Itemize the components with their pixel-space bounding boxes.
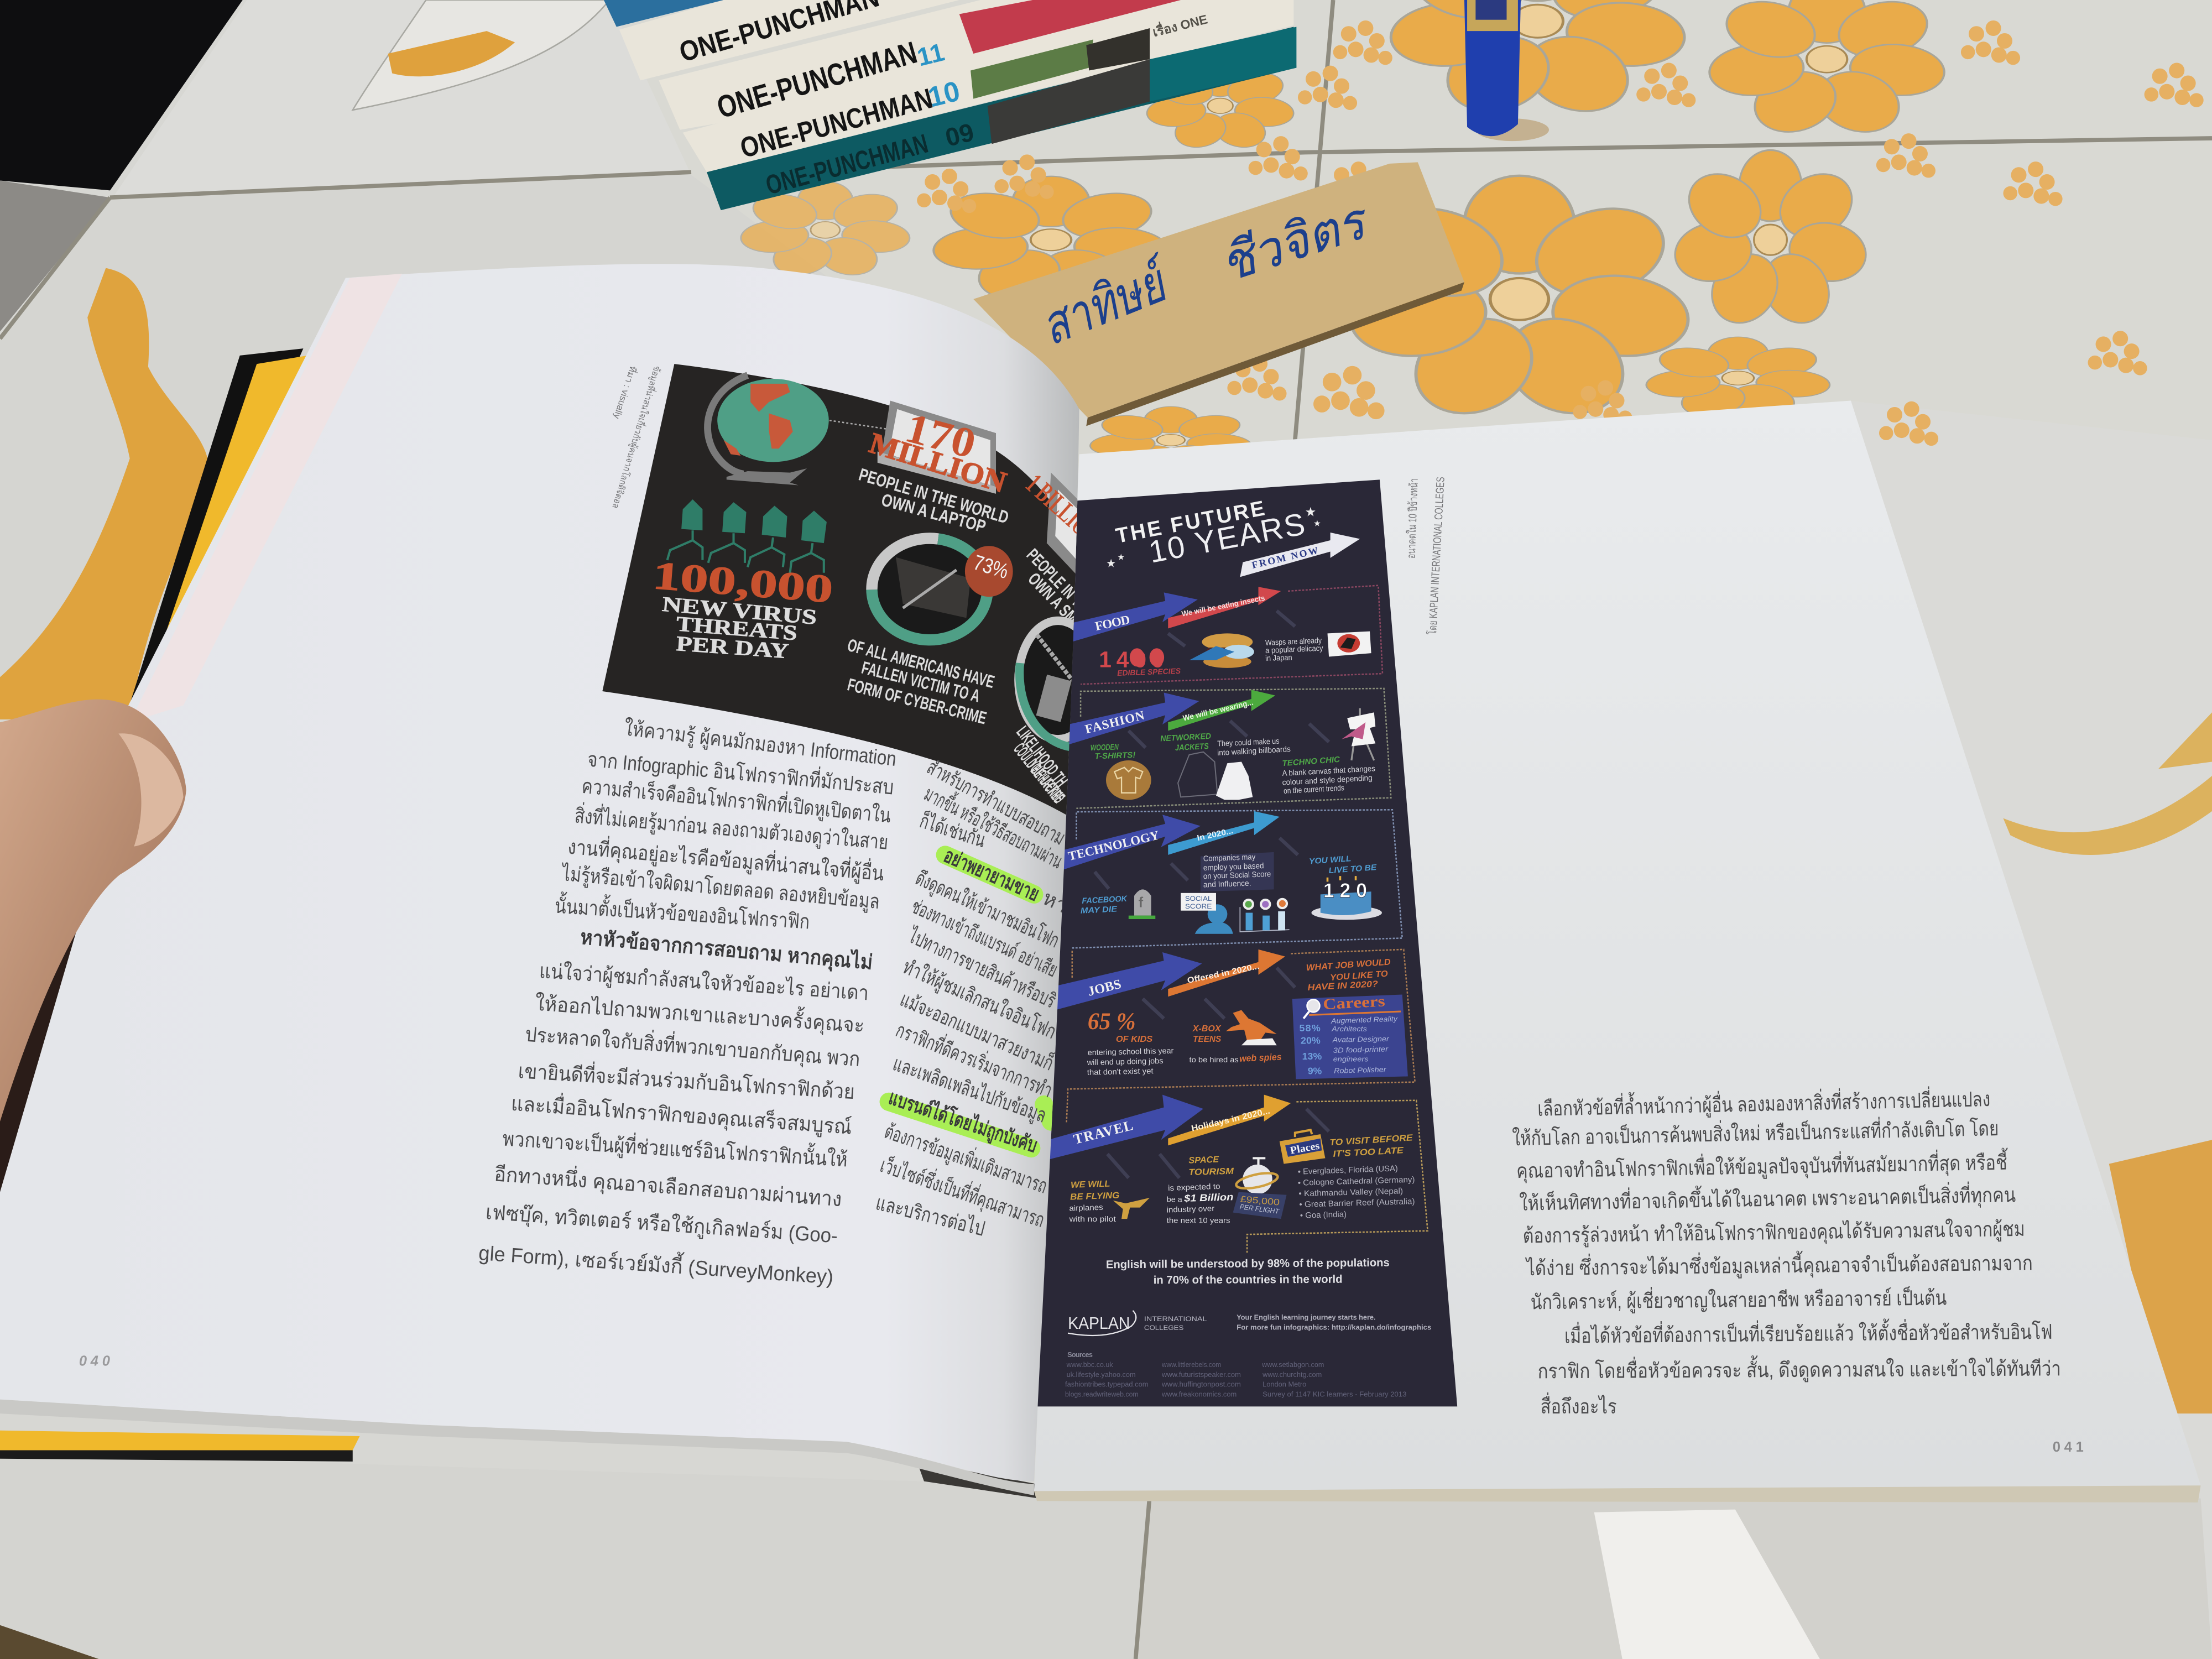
sources: Sources: [1067, 1350, 1093, 1359]
stat: 1 billion smartphones: [1025, 472, 1077, 625]
page 041 body text: ต้องการรู้ล่วงหน้า ทำให้อินโฟกราฟิกของคุณได้รับความสนใจจากผู้ชม: [1522, 1217, 2025, 1248]
footer note: [1237, 1313, 1431, 1331]
stat: 1 billion smartphones: PEOPLE IN THE: [1023, 545, 1098, 622]
icon: social score person: SCORE: [1185, 903, 1212, 910]
bar chart: social scores: [1240, 898, 1290, 932]
text: right column (runs into the gutter): สำหรับการทำแบบสอบถาม: [924, 755, 1069, 849]
section: jobs: that don't exist yet: [1087, 1067, 1154, 1077]
sources: www.futuristspeaker.com: [1161, 1370, 1241, 1379]
title: ★: [1117, 553, 1125, 562]
spine labels: เรื่อง ONE: [1151, 10, 1209, 39]
text: left column: หาหัวข้อจากการสอบถาม หากคุณไม่: [580, 925, 874, 975]
list: places to visit: • Everglades, Florida (USA): [1298, 1164, 1398, 1177]
section: jobs: HAVE IN 2020?: [1307, 979, 1379, 993]
stat: 100,000 new virus threats: 100,000: [651, 554, 834, 611]
spine labels: ONE-PUNCHMAN: [763, 129, 931, 201]
section: jobs: TEENS: [1193, 1035, 1222, 1044]
section: technology: TECHNOLOGY: [1067, 828, 1161, 863]
chart: hacking likelihood donut: LIKELIHOOD TH: [1013, 722, 1072, 790]
statement: English: English will be understood by 98% of the populations: [1106, 1257, 1390, 1271]
table: careers: engineers: [1333, 1055, 1369, 1063]
section: food: FOOD: [1094, 612, 1131, 633]
icon: facebook gravestone: [1129, 889, 1155, 919]
sources: www.setlabgon.com: [1261, 1360, 1324, 1369]
text: right column (runs into the gutter): ไปทางการขายสินค้าหรือบริ: [904, 924, 1060, 1013]
text: right column (runs into the gutter): ช่องทางเข้าถึงแบรนด์ อย่าเสีย: [908, 895, 1061, 982]
arrow: from now: [1240, 533, 1360, 577]
section: travel: [1048, 1095, 1415, 1225]
stat: 100,000 new virus threats: [656, 563, 832, 658]
text: left column: เฟซบุ๊ค, ทวิตเตอร์ หรือใช้กูเกิลฟอร์ม (Goo-: [485, 1201, 838, 1248]
text: left column: เขายินดีที่จะมีส่วนร่วมกับอินโฟกราฟิกด้วย: [518, 1057, 855, 1103]
text: right column (runs into the gutter): หากต้อง: [1039, 886, 1115, 938]
sources: www.littlerebels.com: [1161, 1360, 1221, 1369]
list: places to visit: • Great Barrier Reef (Australia): [1299, 1197, 1415, 1209]
stack of manga books: [604, 0, 1296, 210]
text: left column: ความสำเร็จคืออินโฟกราฟิกที่เปิดหูเปิดตาใน: [581, 772, 892, 828]
table: careers: [1292, 993, 1408, 1079]
text: donut caption: OF ALL AMERICANS HAVE: [846, 635, 997, 692]
spine labels: 09: [942, 117, 977, 152]
table: careers: 3D food-printer: [1333, 1045, 1389, 1055]
section: fashion: into walking billboards: [1217, 745, 1291, 758]
sources: www.churchtg.com: [1262, 1370, 1322, 1379]
hand holding the book: [0, 700, 186, 1192]
text: left column: จาก Infographic อินโฟกราฟิกที่มักประสบ: [586, 745, 895, 799]
statement: English: [1106, 1257, 1390, 1286]
footer note: Your English learning journey starts here.: [1237, 1313, 1375, 1321]
text: left column: งานที่คุณอยู่อะไรคือข้อมูลที่น่าสนใจที่ผู้อื่น: [567, 833, 885, 886]
callout: social score: and Influence.: [1203, 879, 1251, 890]
margin credit: [1405, 477, 1447, 635]
panel: right page: [1034, 400, 2201, 1503]
stat: 1400 edible species: EDIBLE SPECIES: [1117, 666, 1181, 677]
icon: space tourism planet: [1235, 1158, 1279, 1194]
footer note: For more fun infographics: http://kaplan.do/infographics: [1237, 1323, 1431, 1331]
section: technology: YOU WILL: [1309, 854, 1352, 866]
page 041 body text: [1512, 1084, 2061, 1418]
callout: social score: employ you based: [1203, 862, 1264, 873]
stat: 170 million: 170: [900, 404, 980, 467]
icon: places briefcase: Places: [1289, 1140, 1321, 1157]
table: careers: Architects: [1331, 1025, 1367, 1033]
tag: price per flight: [1233, 1192, 1287, 1219]
stat: 1400 edible species: [1099, 647, 1181, 677]
left page content (clipped to the curved page): [478, 364, 1115, 1288]
section: jobs: OF KIDS: [1116, 1035, 1153, 1044]
section: fashion: T-SHIRTS!: [1094, 751, 1136, 761]
text: left column: gle Form), เซอร์เวย์มังกี้ (SurveyMonkey): [478, 1238, 834, 1288]
section: travel: TO VISIT BEFORE: [1329, 1133, 1413, 1147]
text: right column (runs into the gutter): และบริการต่อไป: [874, 1191, 987, 1240]
section: jobs: to be hired as: [1190, 1056, 1239, 1065]
sources: www.huffingtonpost.com: [1161, 1380, 1241, 1389]
section: jobs: X-BOX: [1192, 1024, 1222, 1034]
section: fashion: [1065, 690, 1375, 800]
table: careers: 20%: [1301, 1035, 1321, 1046]
spine labels: ONE-PUNCHMAN: [737, 82, 936, 164]
cardboard name tag: สาทิษย์: [1033, 250, 1180, 356]
icon: wooden shirt: [1106, 760, 1151, 800]
section: jobs: web spies: [1239, 1052, 1282, 1064]
chart: 73% donut: [872, 539, 1013, 640]
section: fashion: JACKETS: [1175, 742, 1209, 753]
margin credit: rotated: ที่มา : visually: [612, 364, 639, 421]
page 041 body text: ได้ง่าย ซึ่งการจะได้มาซึ่งข้อมูลเหล่านี้คุณอาจจำเป็นต้องสอบถามจาก: [1525, 1248, 2033, 1281]
stat: 65% of kids: 65 %: [1088, 1008, 1136, 1035]
section: food: in Japan: [1265, 653, 1292, 663]
text: left column: ให้ความรู้ ผู้คนมักมองหา Information: [623, 717, 898, 771]
text: right column (runs into the gutter): และเพลิดเพลินไปกับข้อมูล: [890, 1052, 1050, 1128]
stat: 170 million: MILLION: [865, 426, 1010, 499]
text: right column (runs into the gutter): ต้องการข้อมูลเพิ่มเติมสามารถ: [881, 1117, 1051, 1199]
table: careers: 9%: [1308, 1066, 1322, 1077]
infographic: cyber statistics: [602, 364, 1105, 818]
icon: jackets: [1178, 752, 1253, 800]
section: travel: TOURISM: [1188, 1166, 1234, 1177]
title: THE FUTURE: [1114, 497, 1266, 548]
page number 040: 040: [79, 1353, 110, 1369]
text: right column (runs into the gutter): มากขึ้น หรือใช้วิธีสอบถามผ่าน: [921, 779, 1068, 873]
icon: globe: [708, 375, 829, 486]
callout: social score: [1201, 852, 1274, 891]
tile flowers: [735, 0, 2204, 475]
spine labels: [676, 0, 1209, 201]
section: fashion: TECHNO CHIC: [1282, 755, 1340, 768]
section: fashion: NETWORKED: [1160, 732, 1212, 744]
icon: facebook gravestone: f: [1139, 895, 1144, 910]
section: technology: In 2020...: [1196, 827, 1234, 843]
section: food: [1070, 587, 1371, 677]
logo: Kaplan International Colleges: INTERNATIONAL: [1144, 1315, 1207, 1323]
callout: social score: on your Social Score: [1203, 870, 1271, 881]
text: left column: ให้ออกไปถามพวกเขาและบางครั้งคุณจะ: [534, 988, 865, 1038]
text: left column: อีกทางหนึ่ง คุณอาจเลือกสอบถามผ่านทาง: [493, 1160, 843, 1212]
arrow: from now: FROM NOW: [1251, 545, 1319, 571]
chart: 73% donut: 73%: [971, 551, 1011, 583]
section: food: Wasps are already: [1265, 637, 1322, 648]
section: travel: with no pilot: [1069, 1215, 1116, 1224]
text: laptop caption: [858, 468, 1008, 531]
section: fashion: on the current trends: [1284, 784, 1344, 796]
title: ★: [1313, 519, 1321, 529]
sources: blogs.readwriteweb.com: [1065, 1390, 1139, 1399]
sources: www.bbc.co.uk: [1066, 1360, 1113, 1369]
section: jobs: [1055, 950, 1408, 1079]
section: jobs: Offered in 2020...: [1187, 962, 1260, 985]
margin credit: โดย KAPLAN INTERNATIONAL COLLEGES: [1426, 477, 1447, 635]
title: ★: [1305, 505, 1316, 519]
text: left column: สิ่งที่ไม่เคยรู้มาก่อน ลองถามตัวเองดูว่าในสาย: [573, 801, 889, 855]
page 041 body text: สื่อถึงอะไร: [1541, 1392, 1616, 1418]
text: right column (runs into the gutter): แม้จะออกแบบมาสวยงามก็: [897, 986, 1058, 1075]
table: careers: Robot Polisher: [1334, 1065, 1386, 1075]
section: food: We will be eating insects: [1181, 594, 1266, 618]
icon: places briefcase: [1280, 1130, 1325, 1164]
section: fashion: FASHION: [1083, 708, 1146, 736]
page 041 body text: เมื่อได้หัวข้อที่ต้องการเป็นที่เรียบร้อยแล้ว ให้ตั้งชื่อหัวข้อสำหรับอินโฟ: [1564, 1317, 2053, 1348]
cardboard name tag: ชีวจิตร: [1213, 192, 1376, 293]
text: right column (runs into the gutter): ทำให้ผู้ชมเลิกสนใจอินโฟก: [899, 955, 1060, 1044]
text: right column (runs into the gutter): ดึงดูดคนให้เข้ามาชมอินโฟก: [912, 866, 1063, 953]
page 041 body text: นักวิเคราะห์, ผู้เชี่ยวชาญในสายอาชีพ หรืออาจารย์ เป็นต้น: [1530, 1284, 1947, 1314]
section: fashion: They could make us: [1217, 737, 1280, 748]
book back cover: [0, 348, 1037, 1498]
section: fashion: We will be wearing...: [1182, 698, 1254, 723]
text: donut caption: [847, 639, 995, 724]
statement: English: in 70% of the countries in the world: [1154, 1274, 1343, 1286]
icon: laptop: [878, 400, 996, 494]
section: travel: SPACE: [1188, 1155, 1220, 1166]
margin credit: อนาคตใน 10 ปีข้างหน้า: [1405, 478, 1421, 559]
icon: social score person: [1181, 893, 1233, 934]
page 041 body text: คุณอาจทำอินโฟกราฟิกเพื่อให้ข้อมูลปัจจุบันที่ทันสมัยมากที่สุด หรือชี้: [1516, 1147, 2008, 1183]
highlighter marks: [889, 855, 1051, 1149]
text: right column (runs into the gutter): เว็บไซต์ซึ่งเป็นที่ที่คุณสามารถ: [877, 1151, 1048, 1233]
section: travel: airplanes: [1069, 1203, 1103, 1213]
icon: 120 birthday cake: 120: [1323, 879, 1367, 901]
dotted section frames: [1067, 586, 1428, 1253]
stat: 100,000 new virus threats: PER DAY: [675, 632, 790, 663]
sources: [1065, 1350, 1406, 1399]
text: laptop caption: OWN A LAPTOP: [879, 489, 988, 536]
section: travel: $1 Billion: [1183, 1191, 1234, 1204]
title: 10 YEARS: [1146, 506, 1308, 570]
tag: price per flight: £95,000: [1240, 1194, 1280, 1208]
panel: left page: [0, 264, 1115, 1495]
section: fashion: WOODEN: [1091, 743, 1119, 753]
page 041 body text: ให้เห็นทิศทางที่อาจเกิดขึ้นได้ในอนาคต เพราะอนาคตเป็นสิ่งที่ทุกคน: [1519, 1180, 2016, 1216]
icon: spy silhouette: [1226, 1010, 1277, 1045]
sources: uk.lifestyle.yahoo.com: [1067, 1370, 1136, 1379]
section: technology: FACEBOOK: [1082, 895, 1128, 906]
text: right column (runs into the gutter): อย่าพยายามขาย: [941, 844, 1043, 905]
title: ★: [1106, 558, 1116, 570]
section: travel: WE WILL: [1071, 1178, 1110, 1190]
text: right column (runs into the gutter): แบรนด์ได้โดยไม่ถูกบังคับ: [885, 1085, 1041, 1159]
section: technology: LIVE TO BE: [1328, 863, 1378, 875]
text: left column: พวกเขาจะเป็นผู้ที่ช่วยแชร์อินโฟกราฟิกนั้นให้: [502, 1124, 848, 1172]
list: places to visit: • Cologne Cathedral (Germany): [1298, 1176, 1415, 1188]
table: careers: Avatar Designer: [1332, 1035, 1389, 1044]
sources: www.freakonomics.com: [1161, 1390, 1237, 1399]
stat: 1 billion smartphones: 1 BILLION: [1020, 468, 1105, 550]
text: left column: นั้นมาตั้งเป็นหัวข้อของอินโฟกราฟิก: [554, 891, 811, 933]
spine labels: ONE-PUNCHMAN: [713, 35, 921, 125]
logo: Kaplan International Colleges: KAPLAN: [1068, 1314, 1130, 1333]
icon: 120 birthday cake: [1311, 876, 1382, 920]
text: donut caption: FORM OF CYBER-CRIME: [846, 674, 989, 728]
section: travel: is expected to: [1168, 1182, 1220, 1193]
text: left column: และเมื่ออินโฟกราฟิกของคุณเสร็จสมบูรณ์: [510, 1089, 853, 1140]
sources: fashiontribes.typepad.com: [1065, 1380, 1149, 1389]
icon: airplane: [1113, 1198, 1150, 1219]
blue lighter: [1464, 0, 1549, 141]
table: careers: 58%: [1299, 1022, 1321, 1034]
tag: price per flight: PER FLIGHT: [1239, 1202, 1280, 1215]
infographic: cyber statistics: YOUR LIFETIME: [1024, 756, 1069, 806]
section: fashion: A blank canvas that changes: [1282, 764, 1375, 778]
section: jobs: entering school this year: [1088, 1047, 1174, 1057]
list: places to visit: • Kathmandu Valley (Nepal): [1298, 1187, 1403, 1198]
text: donut caption: FALLEN VICTIM TO A: [859, 658, 982, 706]
list: places to visit: • Goa (India): [1300, 1210, 1347, 1220]
section: travel: IT'S TOO LATE: [1333, 1145, 1405, 1159]
sources: Survey of 1147 KIC learners - February 2013: [1262, 1390, 1406, 1399]
cardboard name tag: [973, 162, 1464, 426]
icons: virus threats: [667, 499, 827, 573]
text: left column: ไม่รู้หรือเข้าใจผิดมาโดยตลอด ลองหยิบข้อมูล: [560, 862, 881, 914]
icon: japan flag: [1328, 632, 1371, 657]
icon: canvas dress on easel: [1342, 708, 1375, 760]
text: laptop caption: PEOPLE IN THE WORLD: [857, 465, 1011, 528]
section: travel: TRAVEL: [1072, 1117, 1135, 1147]
section: travel: BE FLYING: [1070, 1191, 1120, 1202]
margin credit: rotated: ข้อมูลที่น่าสนใจเกี่ยวกับผู้คนจากโลกดิจิตอล: [609, 364, 664, 510]
chart: hacking likelihood donut: [1014, 616, 1074, 804]
logo: Kaplan International Colleges: [1068, 1311, 1207, 1335]
section: travel: industry over: [1166, 1204, 1215, 1215]
spine labels: 10: [925, 75, 963, 113]
section: food: a popular delicacy: [1265, 644, 1324, 655]
text: right column (runs into the gutter): กราฟิกที่ดีควรเริ่มจากการทำ: [893, 1016, 1057, 1102]
infographic: cyber statistics: COULD BE HACKED: [1010, 739, 1069, 807]
text: right column (runs into the gutter): [874, 755, 1115, 1240]
section: fashion: colour and style depending: [1282, 774, 1373, 787]
callout: social score: Companies may: [1203, 853, 1256, 863]
section: jobs: YOU LIKE TO: [1330, 969, 1389, 983]
title: [1106, 497, 1321, 570]
spine labels: 11: [914, 37, 947, 72]
text: left column: [478, 717, 898, 1288]
icon: social score person: SOCIAL: [1185, 895, 1212, 902]
stat: 100,000 new virus threats: NEW VIRUS: [661, 593, 818, 629]
section: jobs: WHAT JOB WOULD: [1306, 957, 1391, 973]
text: left column: ประหลาดใจกับสิ่งที่พวกเขาบอกกับคุณ พวก: [524, 1020, 861, 1072]
sources: London Metro: [1262, 1380, 1306, 1389]
section: jobs: will end up doing jobs: [1087, 1057, 1164, 1067]
page 041 body text: เลือกหัวข้อที่ล้ำหน้ากว่าผู้อื่น ลองมองหาสิ่งที่สร้างการเปลี่ยนแปลง: [1537, 1084, 1991, 1121]
list: places to visit: [1298, 1164, 1415, 1220]
page 041 body text: กราฟิก โดยชื่อหัวข้อควรจะ สั้น, ดึงดูดความสนใจ และเข้าใจได้ทันทีว่า: [1537, 1353, 2061, 1384]
infographic: The Future 10 Years: [1037, 479, 1457, 1406]
section: travel: the next 10 years: [1167, 1217, 1230, 1225]
text: left column: แน่ใจว่าผู้ชมกำลังสนใจหัวข้ออะไร อย่าเดา: [539, 959, 869, 1005]
stat: 1 billion smartphones: OWN A SMART: [1024, 568, 1099, 645]
text: right column (runs into the gutter): ก็ได้เช่นกัน: [917, 808, 989, 852]
section: technology: [1061, 811, 1382, 934]
section: travel: be a: [1167, 1195, 1182, 1204]
stat: 1400 edible species: 1400: [1099, 647, 1164, 672]
page 041 body text: ให้กับโลก อาจเป็นการค้นพบสิ่งใหม่ หรือเป็นกระแสที่กำลังเติบโต โดย: [1512, 1114, 1999, 1150]
section: technology: MAY DIE: [1080, 905, 1118, 916]
stat: 100,000 new virus threats: THREATS: [675, 612, 798, 645]
logo: Kaplan International Colleges: COLLEGES: [1144, 1324, 1183, 1332]
background streaks: [1095, 611, 1329, 1178]
table: careers: Augmented Reality: [1331, 1015, 1399, 1025]
section: jobs: JOBS: [1086, 977, 1123, 999]
section: travel: Holidays in 2020...: [1191, 1107, 1271, 1134]
table: careers: 13%: [1302, 1051, 1322, 1062]
page number 041: 041: [2053, 1439, 2084, 1455]
icon: wasp burger: [1190, 633, 1254, 668]
table: careers: Careers: [1323, 993, 1385, 1013]
